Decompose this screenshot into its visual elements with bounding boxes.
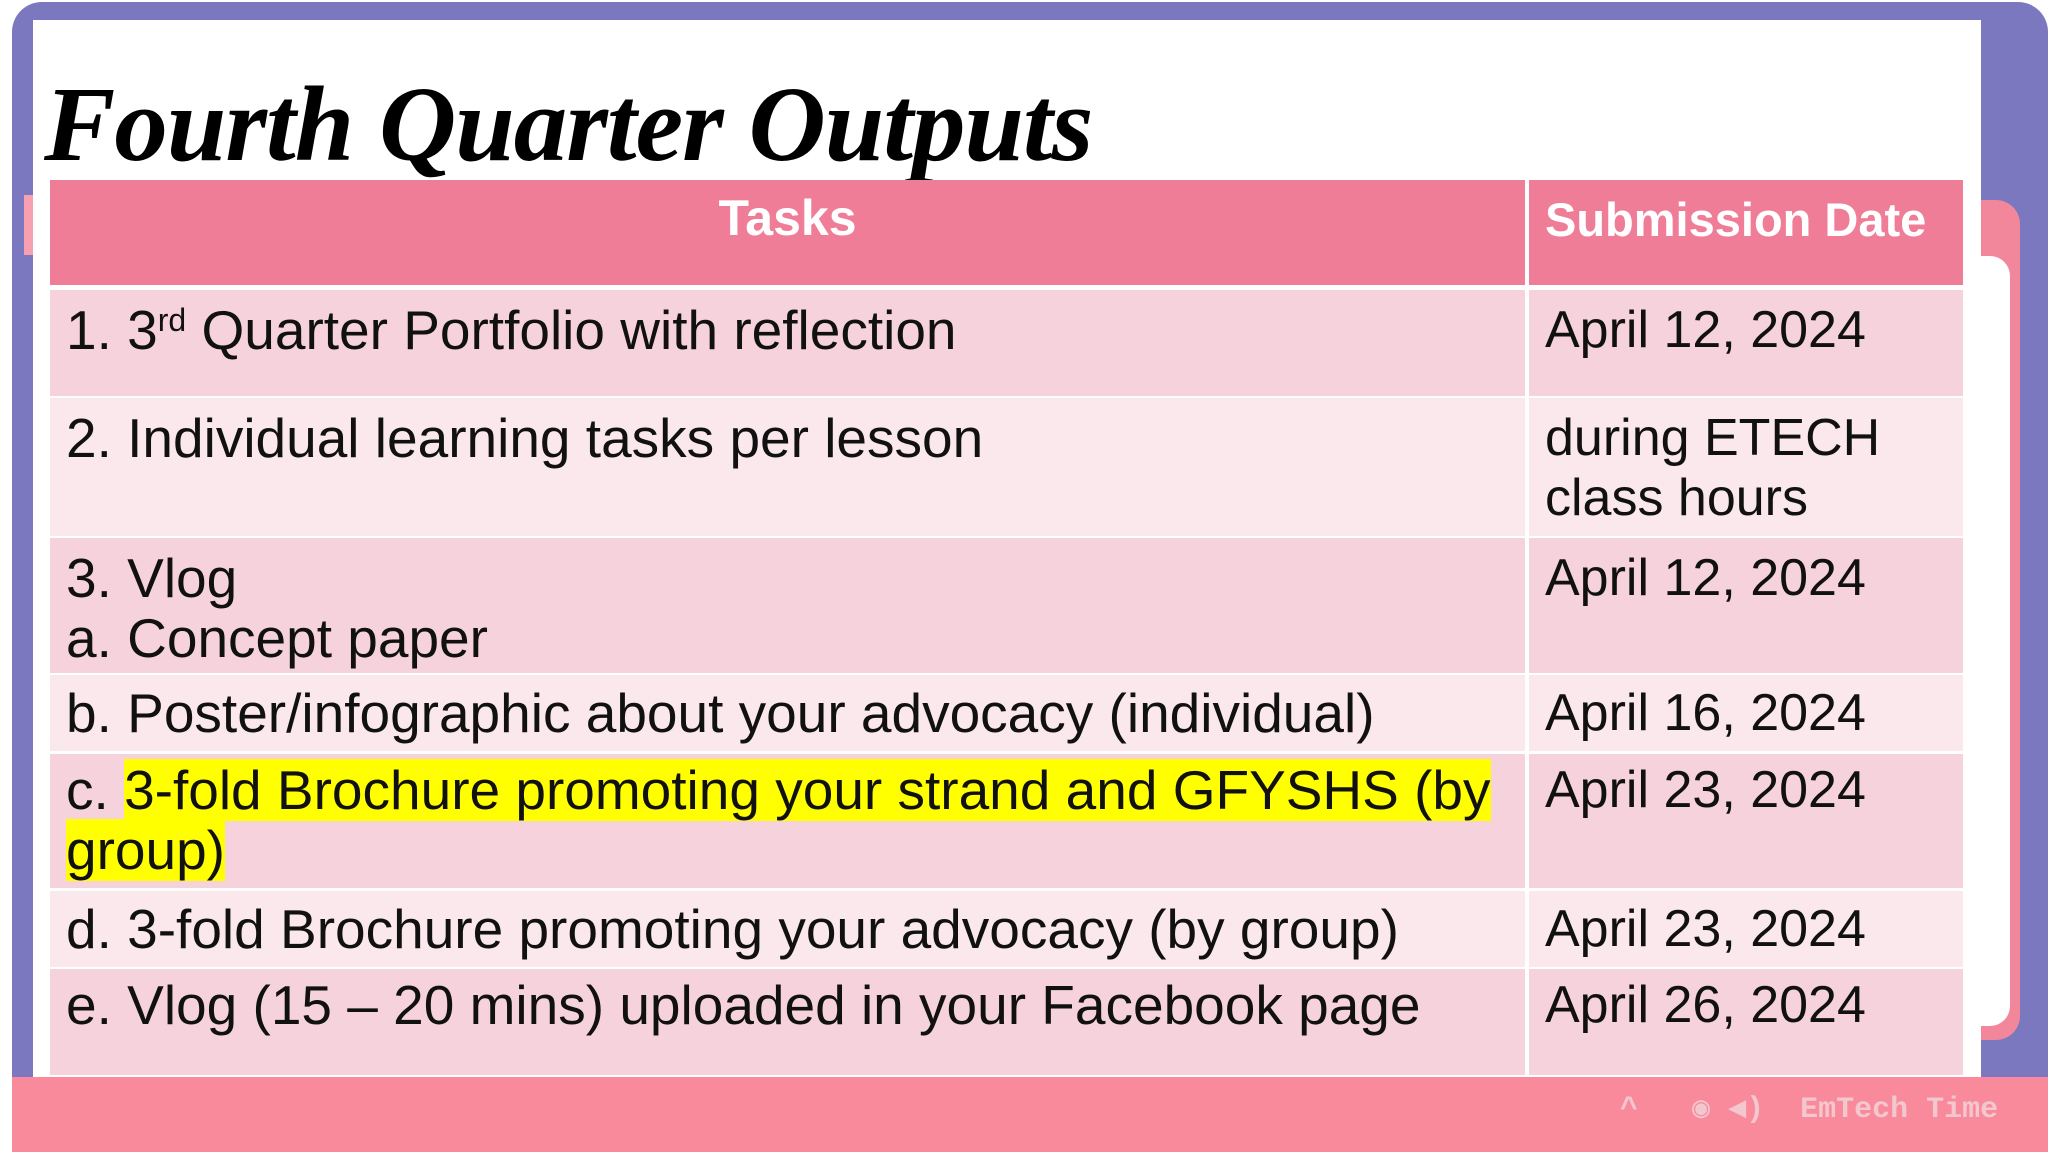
row 1: 1. 3rd Quarter Portfolio with reflection — [66, 299, 957, 361]
row 3: 3. Vlog — [66, 547, 237, 609]
header: Tasks: Tasks — [718, 190, 857, 246]
row 5 (highlighted) — [50, 754, 1963, 888]
row 3: April 12, 2024 — [1545, 549, 1866, 607]
row 4: April 16, 2024 — [1545, 684, 1866, 742]
row 2: during ETECH — [1545, 409, 1880, 467]
row 5 (highlighted): April 23, 2024 — [1545, 761, 1866, 819]
row 3: a. Concept paper — [66, 607, 488, 669]
row 4: b. Poster/infographic about your advocacy (individual) — [66, 682, 1375, 744]
row 2: class hours — [1545, 469, 1808, 527]
row 7 — [50, 969, 1963, 1075]
row 6 — [50, 891, 1963, 967]
table — [50, 180, 1963, 1076]
pink left card — [24, 195, 44, 255]
row 2 — [50, 398, 1963, 536]
row 3 — [50, 538, 1963, 673]
row 6: d. 3-fold Brochure promoting your advocacy (by group) — [66, 898, 1399, 960]
taskbar status: EmTech Time: ^ ◉ ◀) EmTech Time — [1620, 1093, 1998, 1127]
row 5 (highlighted): c. 3-fold Brochure promoting your strand and GFYSHS (by group) — [66, 759, 1491, 881]
row 2: 2. Individual learning tasks per lesson — [66, 407, 983, 469]
row 7: e. Vlog (15 – 20 mins) uploaded in your Facebook page — [66, 974, 1420, 1036]
row 1 — [50, 290, 1963, 396]
row 4 — [50, 675, 1963, 751]
row 6: April 23, 2024 — [1545, 900, 1866, 958]
row 1: April 12, 2024 — [1545, 301, 1866, 359]
pink right card — [1960, 200, 2020, 1040]
bottom bar — [12, 1077, 2048, 1152]
row 7: April 26, 2024 — [1545, 976, 1866, 1034]
header: Submission Date: Submission Date — [1545, 193, 1926, 246]
header row — [50, 180, 1525, 285]
title: Fourth Quarter Outputs — [44, 66, 1092, 184]
